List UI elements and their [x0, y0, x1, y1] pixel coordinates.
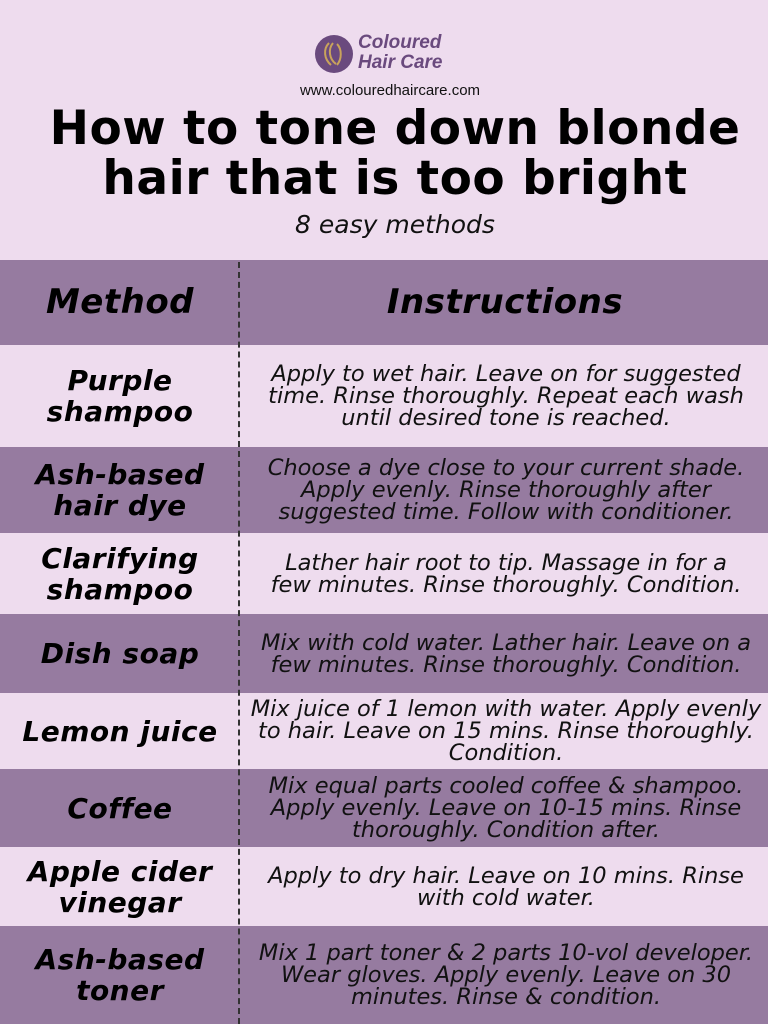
row: Ash-based toner: minutes. Rinse & condition. [351, 984, 661, 1010]
row: Dish soap [0, 614, 768, 693]
row: Clarifying shampoo: Lather hair root to tip. Massage in for a [285, 550, 727, 576]
row: Purple shampoo [46, 361, 744, 431]
row: Lemon juice: Lemon juice [22, 714, 218, 748]
row: Lemon juice: Mix juice of 1 lemon with water. Apply evenly [251, 696, 761, 722]
row: Ash-based hair dye: Apply evenly. Rinse thoroughly after [301, 477, 711, 503]
row: Coffee [0, 769, 768, 847]
row: Dish soap: Mix with cold water. Lather hair. Leave on a [261, 630, 751, 656]
row: Clarifying shampoo: Clarifying [41, 542, 199, 574]
header: Method: Method [46, 282, 194, 322]
row: Dish soap: few minutes. Rinse thoroughly. Condition. [271, 652, 741, 678]
logo text: Coloured [358, 32, 441, 53]
title: How to tone down blonde [50, 101, 740, 156]
row: Clarifying shampoo: shampoo [47, 572, 193, 606]
header: Instructions: Instructions [387, 282, 623, 322]
row: Coffee: Mix equal parts cooled coffee & shampoo. [269, 773, 743, 799]
row: Purple shampoo: Purple [68, 364, 172, 397]
row: Dish soap: Dish soap [41, 637, 199, 670]
row: Lemon juice: to hair. Leave on 15 mins. Rinse thoroughly. [258, 718, 754, 744]
row: Ash-based hair dye: suggested time. Follow with conditioner. [278, 499, 733, 525]
row: Coffee: Apply evenly. Leave on 10-15 mins. Rinse [271, 795, 741, 821]
row: Ash-based hair dye: Ash-based [35, 458, 205, 491]
row: Ash-based toner: Ash-based [35, 943, 205, 976]
title: hair that is too bright [102, 151, 688, 206]
row: Ash-based toner: Mix 1 part toner & 2 parts 10-vol developer. [259, 940, 753, 966]
table header [0, 260, 768, 345]
row: Ash-based hair dye: Choose a dye close to your current shade. [268, 455, 744, 481]
row: Coffee: Coffee [67, 792, 173, 824]
row: Ash-based toner: Wear gloves. Apply evenly. Leave on 30 [281, 962, 731, 988]
website url: www.colouredhaircare.com [300, 82, 480, 99]
row: Clarifying shampoo [41, 542, 741, 606]
row: Apple cider vinegar: Apply to dry hair. Leave on 10 mins. Rinse [268, 862, 744, 888]
row: Purple shampoo: shampoo [47, 395, 193, 428]
row: Apple cider vinegar [26, 854, 744, 918]
row: Coffee: thoroughly. Condition after. [352, 817, 660, 843]
row: Lemon juice [22, 696, 762, 766]
row: Purple shampoo: Apply to wet hair. Leave on for suggested [271, 361, 741, 387]
subtitle: 8 easy methods [295, 210, 495, 239]
row: Lemon juice: Condition. [449, 740, 563, 766]
logo text [358, 32, 442, 73]
logo [315, 32, 442, 73]
row: Ash-based hair dye: hair dye [53, 489, 187, 522]
row: Apple cider vinegar: Apple cider [28, 854, 212, 888]
row: Apple cider vinegar: with cold water. [417, 884, 595, 910]
row: Apple cider vinegar: vinegar [58, 886, 182, 918]
row: Purple shampoo: time. Rinse thoroughly. Repeat each wash [268, 383, 744, 409]
row: Purple shampoo: until desired tone is reached. [341, 405, 671, 431]
logo text: Hair Care [358, 52, 442, 73]
row: Ash-based hair dye [0, 447, 768, 533]
title [50, 101, 740, 206]
row: Ash-based toner [0, 926, 768, 1024]
icon: logo circle [315, 35, 353, 73]
row: Ash-based toner: toner [76, 974, 164, 1007]
row: Clarifying shampoo: few minutes. Rinse thoroughly. Condition. [271, 572, 741, 598]
